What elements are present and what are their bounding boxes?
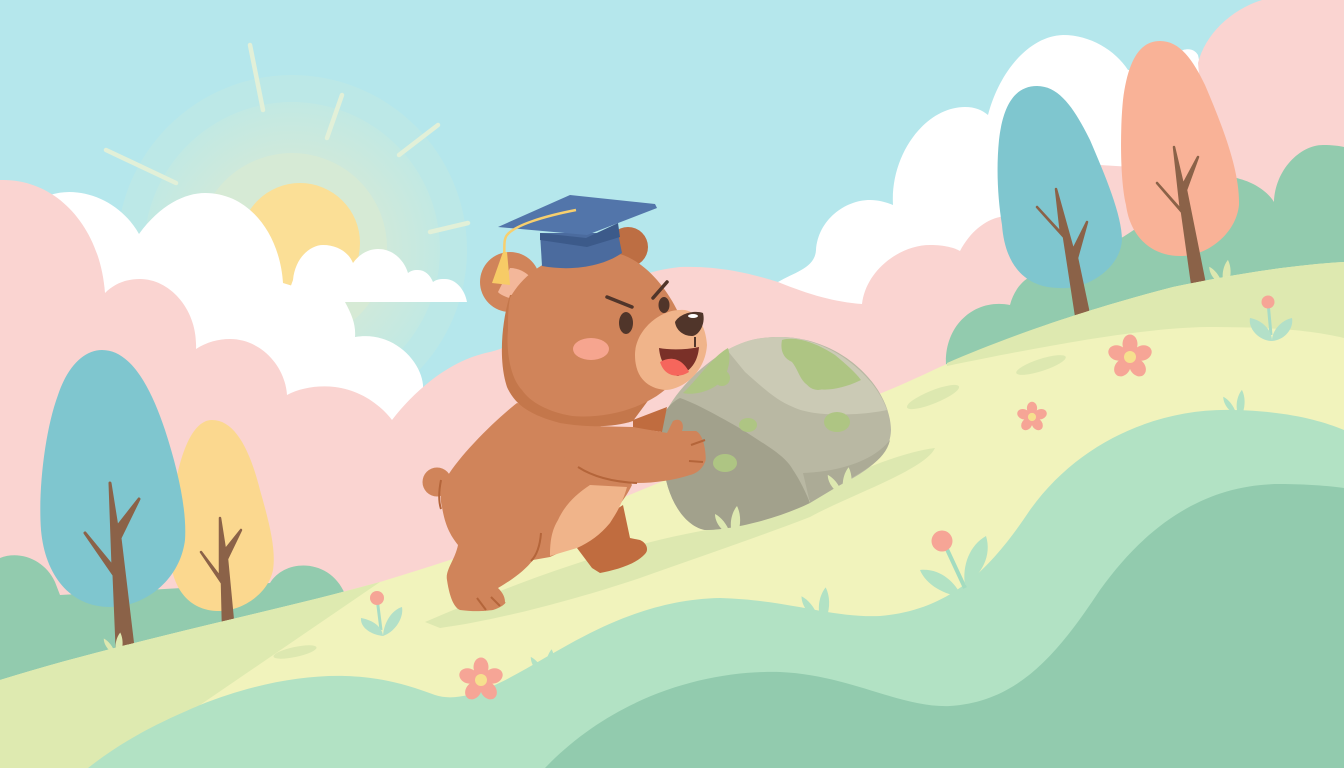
sun: [240, 183, 360, 303]
hill: mint: [88, 410, 1344, 768]
hill patches: [272, 351, 1068, 661]
pink hill top right: [1198, 0, 1344, 250]
ear left: [480, 252, 540, 312]
belly: [550, 485, 627, 556]
moss: [683, 339, 861, 472]
cheek: [573, 338, 609, 360]
grass tufts near boulder: [715, 467, 852, 533]
bear: [422, 195, 707, 611]
hill: main yellow slope: [0, 262, 1344, 768]
hill: left slope shade: [0, 582, 380, 768]
tree: orange right: [1121, 41, 1239, 283]
small cloud: [285, 245, 467, 302]
white clouds right: [778, 35, 1240, 325]
sun rays: [106, 45, 468, 232]
white clouds left: [50, 192, 423, 425]
sprouts with buds: [361, 296, 1292, 636]
pink hills: [0, 165, 1344, 620]
ground shadow: [425, 448, 935, 628]
grass tufts behind hill: [104, 260, 1231, 653]
ear right: [608, 227, 648, 267]
bushes right: [946, 145, 1344, 365]
tree: yellow left: [170, 420, 274, 625]
tree: blue right: [998, 86, 1122, 315]
eyes: [619, 297, 670, 334]
body: [441, 403, 632, 611]
graduation cap: [492, 195, 657, 285]
brows: [607, 282, 667, 307]
mouth: [659, 337, 699, 376]
tree: blue left: [40, 350, 185, 647]
tassel: [492, 210, 576, 285]
hill: upper right band: [947, 262, 1344, 366]
muzzle: [635, 310, 707, 390]
arm: [540, 420, 706, 483]
bushes left: [0, 555, 380, 690]
back leg: [577, 505, 647, 573]
nose: [675, 312, 704, 336]
tail: [422, 468, 452, 496]
grass tufts: [531, 390, 1245, 675]
flowers: [457, 334, 1154, 703]
hill: dark green: [545, 484, 1344, 768]
head: [508, 251, 690, 416]
sun halo: [117, 75, 467, 425]
head shade: [502, 290, 678, 426]
chest shade: [633, 407, 667, 432]
boulder: [661, 337, 891, 530]
